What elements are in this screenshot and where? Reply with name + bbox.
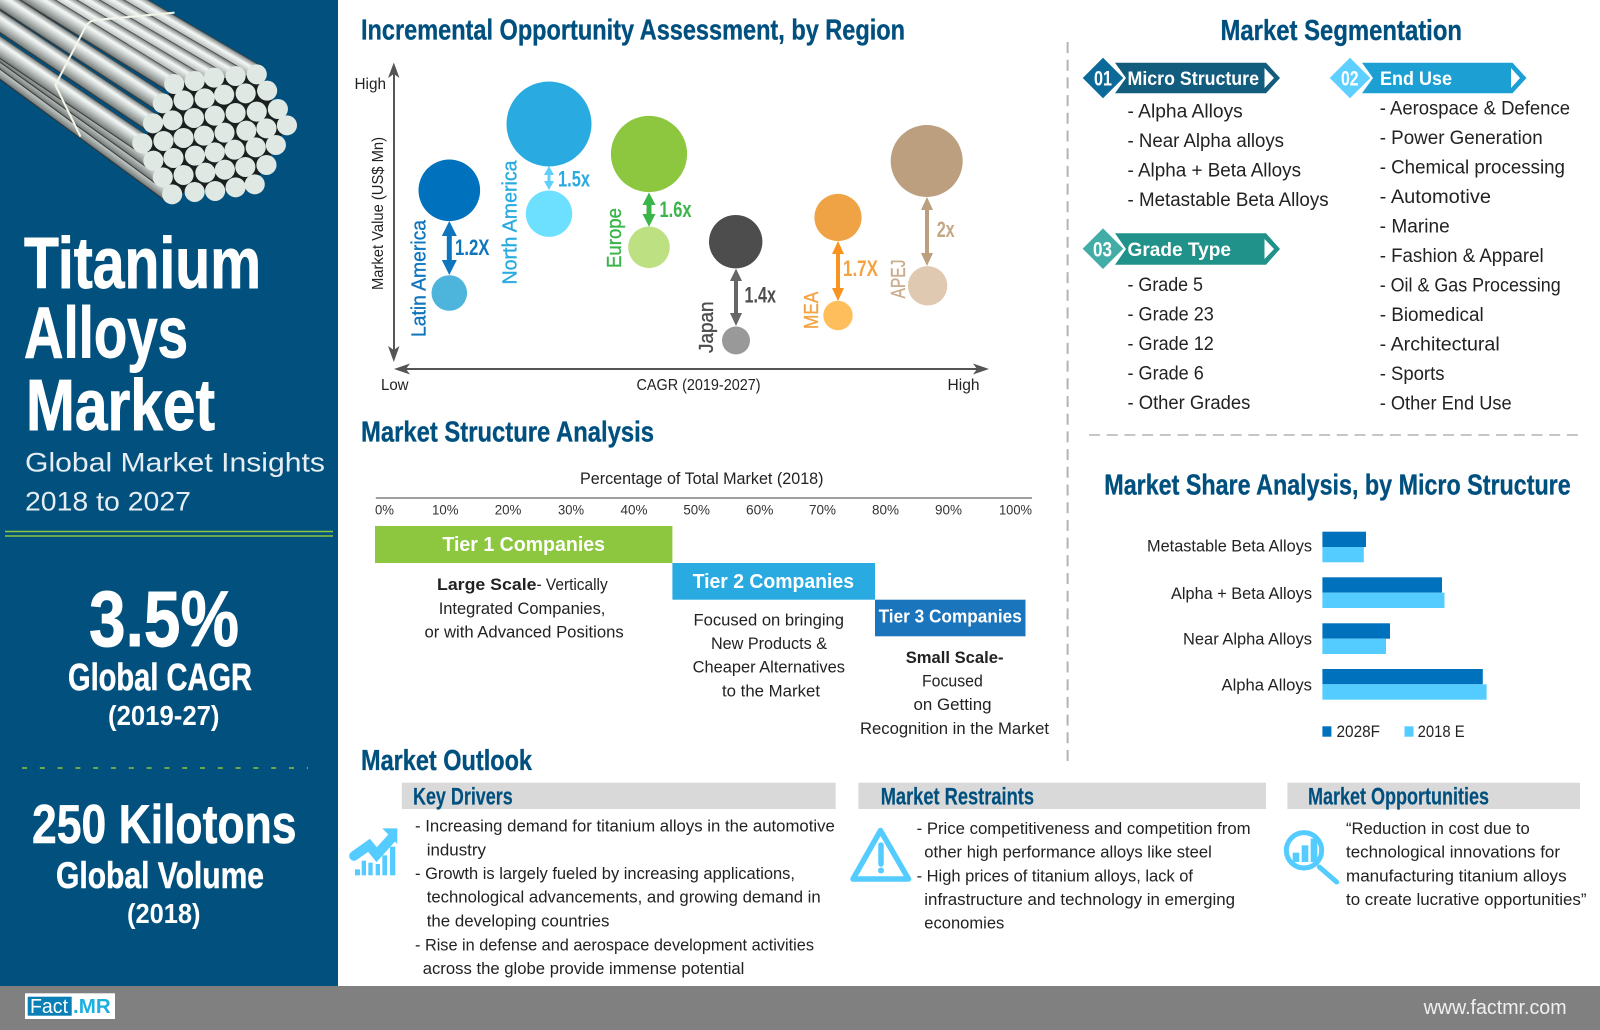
title: Alloys [24, 294, 188, 374]
subheading: market opportunities: Market Opportunities [1308, 783, 1489, 810]
bars: metastable beta alloys [1147, 532, 1366, 562]
heading: market outlook: Market Outlook [361, 745, 533, 777]
region: Europe: Europe [604, 208, 626, 268]
ribbon: micro structure [1082, 57, 1280, 99]
list: end use: - Architectural [1380, 335, 1500, 356]
region: Latin America [408, 160, 490, 337]
tier 2: Tier 2 Companies [693, 571, 854, 593]
bars: alpha alloys: Alpha Alloys [1222, 675, 1312, 694]
heading: incremental opportunity: Incremental Opportunity Assessment, by Region [361, 14, 905, 46]
stat: global volume: Global Volume [56, 855, 264, 896]
text: opportunities: to create lucrative opportunities” [1346, 890, 1587, 909]
percent scale: 60% [746, 501, 773, 517]
bars: metastable beta alloys: Metastable Beta Alloys [1147, 536, 1312, 555]
text: restraints: - Price competitiveness and competition from [917, 819, 1251, 838]
image: titanium rod bundle [0, 0, 297, 204]
region: North America: North America [500, 160, 522, 284]
bars: alpha + beta alloys: Alpha + Beta Alloys [1171, 584, 1312, 603]
title: Titanium [24, 224, 261, 304]
axis labels [354, 76, 980, 394]
region: Japan: 1.4x [744, 282, 777, 308]
text: opportunities: technological innovations for [1346, 843, 1560, 862]
region: Latin America: 1.2X [455, 235, 490, 260]
list: end use: - Chemical processing [1380, 157, 1565, 178]
region: Europe [604, 116, 692, 268]
chart: market structure tiers [375, 469, 1049, 738]
ribbon: grade type: Grade Type [1128, 240, 1231, 261]
tier 3: Small Scale- [906, 648, 1004, 667]
ribbon: end use [1329, 57, 1526, 99]
heading: market structure: Market Structure Analysis [361, 417, 654, 449]
list: end use: - Biomedical [1380, 305, 1484, 326]
panel: market restraints [853, 783, 1266, 933]
list: end use: - Aerospace & Defence [1380, 98, 1570, 119]
region: MEA: MEA [801, 291, 823, 329]
text: drivers: industry [427, 840, 486, 859]
ribbon: grade type [1082, 228, 1280, 270]
ribbon: end use: End Use [1380, 69, 1452, 90]
tier 1: Large Scale [437, 575, 536, 594]
list: micro structure: - Alpha + Beta Alloys [1128, 161, 1301, 182]
list: end use: - Power Generation [1380, 128, 1543, 149]
logo: Fact [30, 996, 68, 1018]
ribbon: micro structure: Micro Structure [1128, 69, 1259, 90]
axis labels: Market Value (US$ Mn) [370, 137, 387, 290]
stat: global CAGR: Global CAGR [68, 657, 252, 699]
bars: near alpha alloys [1183, 623, 1390, 654]
region: APEJ [888, 125, 963, 305]
text: drivers: - Increasing demand for titanium alloys in the automotive [415, 817, 835, 836]
tier 3 [860, 600, 1049, 738]
region: APEJ: APEJ [888, 260, 910, 298]
axis title: Percentage of Total Market (2018) [580, 469, 824, 488]
list: micro structure: - Metastable Beta Alloys [1128, 190, 1329, 211]
list: end use: - Other End Use [1380, 394, 1512, 415]
tier 3: Recognition in the Market [860, 719, 1049, 738]
text: restraints: - High prices of titanium alloys, lack of [917, 866, 1193, 885]
panel: micro structure [1082, 57, 1329, 211]
subtitle: Global Market Insights [25, 448, 325, 478]
tier 3: on Getting [914, 695, 992, 714]
stat: global CAGR [68, 574, 252, 731]
text: drivers: across the globe provide immense potential [423, 959, 744, 978]
list: end use: - Sports [1380, 364, 1444, 385]
region: APEJ: 2x [937, 217, 955, 242]
tier 2: to the Market [722, 681, 820, 700]
stat: global volume: 250 Kilotons [32, 793, 296, 855]
list: grade type: - Grade 23 [1128, 304, 1214, 325]
tier 3: Focused [922, 672, 983, 691]
list: grade type [1128, 275, 1250, 414]
list: micro structure: - Alpha Alloys [1128, 101, 1243, 122]
stat: global CAGR: 3.5% [89, 574, 239, 663]
text: drivers: the developing countries [427, 911, 610, 930]
tier 1: Integrated Companies, [439, 599, 605, 618]
tier 2: Focused on bringing [694, 610, 844, 629]
list: grade type: - Grade 5 [1128, 275, 1203, 296]
tier 2 [672, 563, 875, 700]
logo: .MR [73, 996, 111, 1018]
logo [25, 993, 115, 1019]
region: Japan: Japan [696, 302, 718, 353]
list: grade type: - Other Grades [1128, 393, 1250, 414]
stat: global volume [32, 793, 296, 929]
axis labels: Low [381, 377, 409, 394]
icon: warning triangle [853, 830, 908, 879]
list: micro structure: - Near Alpha alloys [1128, 131, 1284, 152]
subheading: market restraints: Market Restraints [881, 783, 1034, 810]
region: MEA: 1.7X [843, 256, 878, 281]
region: North America: 1.5x [558, 166, 591, 192]
tier 2: Cheaper Alternatives [693, 658, 845, 677]
title [24, 224, 261, 446]
panel: grade type [1082, 228, 1280, 414]
footer [0, 986, 1600, 1030]
percent scale: 90% [935, 501, 962, 517]
list: end use [1380, 98, 1570, 415]
stat: global CAGR: (2019-27) [108, 700, 220, 731]
list: grade type: - Grade 6 [1128, 364, 1204, 385]
text: restraints: infrastructure and technology in emerging [924, 890, 1235, 909]
bars: alpha alloys [1222, 669, 1487, 700]
list: micro structure [1128, 101, 1329, 211]
ribbon: grade type: 03 [1093, 238, 1112, 262]
subtitle: 2018 to 2027 [25, 486, 191, 516]
percent scale: 40% [620, 501, 648, 517]
list: end use: - Oil & Gas Processing [1380, 276, 1561, 297]
icon: magnifier chart [1286, 833, 1337, 882]
text: opportunities: manufacturing titanium alloys [1346, 866, 1567, 885]
legend: 2028F [1336, 722, 1380, 741]
bars: near alpha alloys: Near Alpha Alloys [1183, 630, 1312, 649]
percent scale: 70% [809, 501, 836, 517]
ribbon: micro structure: 01 [1094, 68, 1112, 90]
panel: sidebar [0, 0, 338, 986]
tier 1: - Vertically [536, 575, 608, 594]
list: end use: - Automotive [1380, 187, 1491, 208]
text: restraints: economies [924, 914, 1004, 933]
percent scale: 0% [375, 501, 394, 517]
chart axes [388, 62, 989, 374]
text: restraints: other high performance alloys like steel [924, 843, 1212, 862]
tier 1 [375, 526, 672, 642]
axis labels: High [948, 377, 980, 394]
bubble chart: opportunity by region [354, 62, 989, 394]
region: Europe: 1.6x [660, 197, 692, 222]
panel: key drivers [354, 783, 836, 978]
subtitle [25, 448, 325, 516]
axis labels: High [354, 76, 386, 93]
text: restraints [917, 819, 1251, 933]
tier 3: Tier 3 Companies [879, 606, 1022, 626]
website: www.factmr.com [1423, 997, 1567, 1019]
list: end use: - Marine [1380, 216, 1450, 237]
percent scale: 100% [999, 501, 1032, 517]
ribbon: end use: 02 [1341, 68, 1358, 90]
bar chart: market share [1147, 532, 1487, 741]
tier 1: or with Advanced Positions [424, 623, 624, 642]
region: North America [500, 82, 592, 284]
axis labels: CAGR (2019-2027) [636, 377, 760, 394]
text: drivers: - Rise in defense and aerospace development activities [415, 935, 814, 954]
panel: market opportunities [1286, 783, 1587, 909]
percent scale: 80% [872, 501, 899, 517]
list: grade type: - Grade 12 [1128, 334, 1214, 355]
text: drivers: technological advancements, and growing demand in [427, 888, 821, 907]
panel: end use [1329, 57, 1570, 415]
percent scale: 30% [558, 501, 584, 517]
legend: 2018 E [1418, 722, 1465, 741]
list: end use: - Fashion & Apparel [1380, 246, 1544, 267]
bars: alpha + beta alloys [1171, 577, 1444, 608]
heading: market segmentation: Market Segmentation [1220, 15, 1462, 47]
percent scale [375, 501, 1032, 517]
icon: growth chart [354, 828, 397, 875]
tier 1: Tier 1 Companies [442, 534, 605, 556]
title: Market [26, 366, 215, 446]
stat: global volume: (2018) [127, 898, 200, 929]
tier 2: New Products & [711, 634, 828, 653]
text: opportunities [1346, 819, 1587, 909]
legend [1322, 722, 1465, 741]
region: MEA [801, 194, 878, 330]
text: opportunities: “Reduction in cost due to [1346, 819, 1530, 838]
percent scale: 20% [495, 501, 521, 517]
region: Japan [696, 215, 777, 354]
text: drivers [415, 817, 835, 978]
text: drivers: - Growth is largely fueled by increasing applications, [415, 864, 795, 883]
percent scale: 50% [683, 501, 710, 517]
percent scale: 10% [432, 501, 458, 517]
region: Latin America: Latin America [408, 219, 430, 337]
subheading: key drivers: Key Drivers [413, 783, 513, 810]
